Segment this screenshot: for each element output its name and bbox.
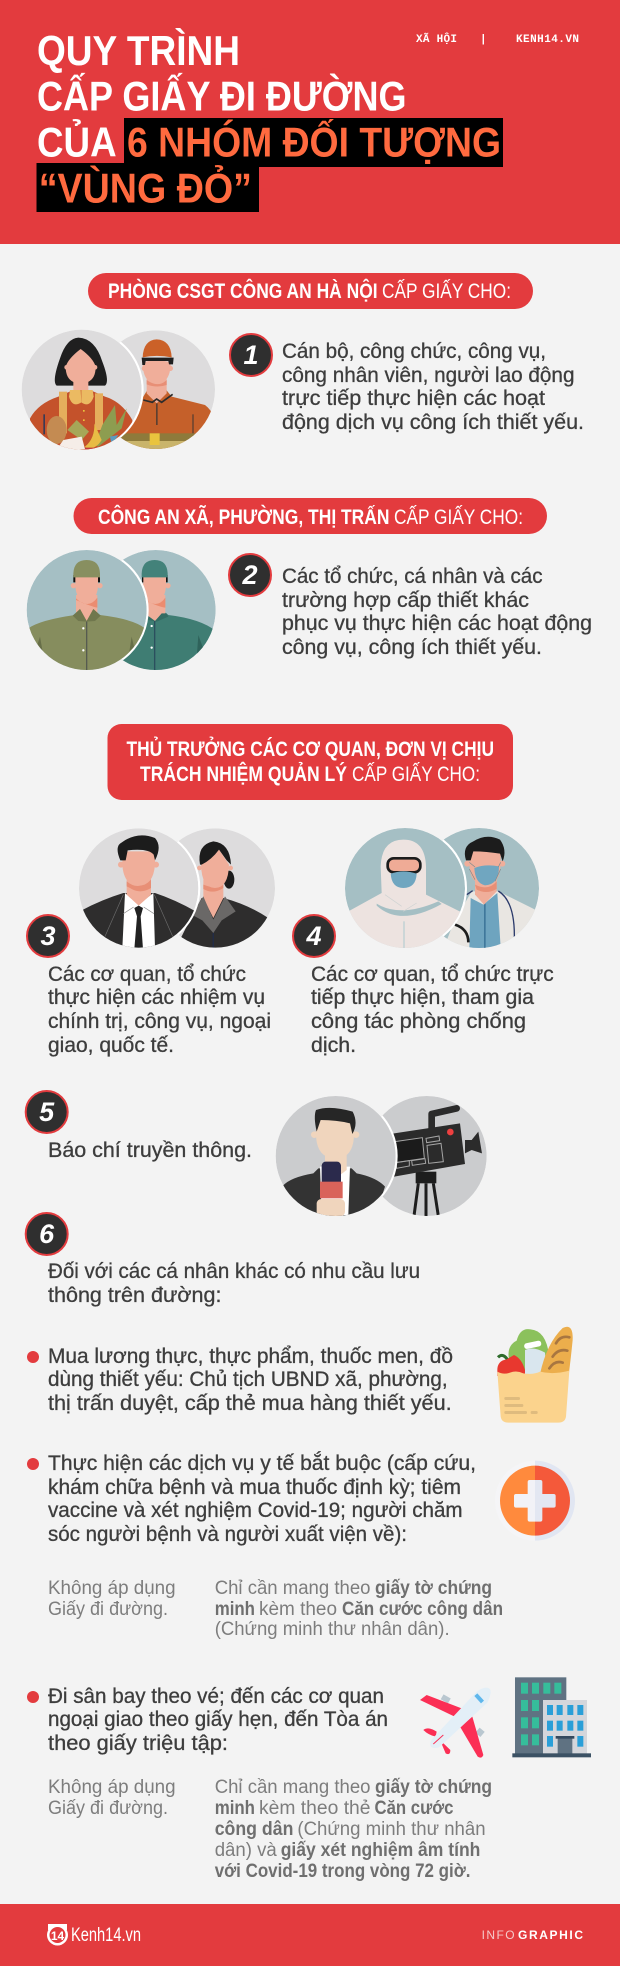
title: [36, 27, 503, 212]
text: item 4 description: [311, 963, 554, 1057]
text: item 3 description: chính trị, công vụ, ngoại: [48, 1010, 271, 1033]
panel: group 3 heading: TRÁCH NHIỆM QUẢN LÝ: [140, 762, 347, 786]
footer label: infographic: INFO: [482, 1928, 515, 1942]
text: item 4 description: tiếp thực hiện, tham gia: [311, 986, 534, 1009]
text: group 2 description: công vụ, công ích thiết yếu.: [282, 636, 542, 659]
header tag: [416, 32, 579, 46]
title: CỦA: [37, 118, 117, 166]
text: item 4 description: công tác phòng chống: [311, 1010, 526, 1033]
bullet: airport and appointments: Đi sân bay theo vé; đến các cơ quan: [48, 1685, 384, 1708]
title: 6 NHÓM ĐỐI TƯỢNG: [127, 118, 501, 166]
text: group 1 description: trực tiếp thực hiện các hoạt: [282, 387, 545, 410]
panel: group 1 heading: [88, 273, 533, 309]
text: item 6 intro: Đối với các cá nhân khác có nhu cầu lưu: [48, 1260, 420, 1283]
panel: group 3 heading: THỦ TRƯỞNG CÁC CƠ QUAN, ĐƠN VỊ CHỊU: [126, 737, 494, 761]
text: item 6 intro: thông trên đường:: [48, 1284, 222, 1307]
panel: group 2 heading: [74, 498, 547, 534]
badge: number 1: [230, 334, 272, 376]
badge: number 3: 3: [40, 921, 56, 951]
text: medical services note right: minh: [215, 1599, 255, 1620]
text: airport note right: kèm theo thẻ: [259, 1798, 370, 1819]
text: group 2 description: [282, 565, 592, 659]
illustration: office man and woman: [77, 826, 275, 950]
header tag: |: [480, 34, 487, 46]
text: item 4 description: dịch.: [311, 1034, 356, 1057]
bullet: airport and appointments: ngoại giao theo giấy hẹn, đến Tòa án: [48, 1708, 388, 1731]
bullet: buying essentials: dùng thiết yếu: Chủ tịch UBND xã, phường,: [48, 1368, 448, 1391]
text: group 1 description: động dịch vụ công ích thiết yếu.: [282, 411, 584, 434]
illustration: reporter and camera: [274, 1094, 487, 1218]
panel: group 3 heading: [108, 724, 513, 800]
panel: header: [0, 0, 620, 244]
text: medical services note right: Căn cước công dân: [342, 1599, 503, 1620]
title: CẤP GIẤY ĐI ĐƯỜNG: [37, 72, 406, 120]
badge: number 5: 5: [39, 1097, 55, 1127]
header tag: XÃ HỘI: [416, 32, 457, 46]
illustration: two officers: [25, 548, 217, 672]
icon: office building: [512, 1677, 591, 1757]
bullet: medical services: Thực hiện các dịch vụ y tế bắt buộc (cấp cứu,: [48, 1452, 476, 1475]
bullet: medical services: khám chữa bệnh và mua thuốc định kỳ; tiêm: [48, 1476, 461, 1499]
footer label: infographic: [482, 1928, 583, 1942]
text: group 2 description: trường hợp cấp thiết khác: [282, 589, 529, 612]
footer label: infographic: GRAPHIC: [518, 1928, 583, 1942]
text: medical services note right: kèm theo: [259, 1599, 337, 1620]
bullet: buying essentials: thị trấn duyệt, cấp thẻ mua hàng thiết yếu.: [48, 1392, 452, 1415]
icon: medical cross: [495, 1461, 575, 1541]
text: airport note right: giấy xét nghiệm âm tính: [281, 1840, 480, 1861]
panel: group 1 heading: PHÒNG CSGT CÔNG AN HÀ NỘI: [108, 279, 378, 303]
text: medical services note right: [215, 1578, 503, 1640]
text: group 2 description: Các tổ chức, cá nhân và các: [282, 565, 542, 588]
text: item 3 description: Các cơ quan, tổ chức: [48, 963, 246, 986]
text: airport note right: (Chứng minh thư nhân: [297, 1819, 486, 1840]
text: airport note right: [215, 1777, 492, 1882]
icon: grocery bag: [497, 1327, 573, 1423]
panel: footer: [0, 1904, 620, 1966]
logo: Kenh14: [47, 1924, 141, 1946]
badge: number 6: 6: [39, 1219, 55, 1249]
panel: group 1 heading: CẤP GIẤY CHO:: [382, 280, 511, 303]
text: airport note left: [48, 1777, 176, 1819]
text: item 5 description: Báo chí truyền thông.: [48, 1139, 252, 1162]
bullet: buying essentials: Mua lương thực, thực phẩm, thuốc men, đồ: [48, 1345, 453, 1368]
text: item 3 description: thực hiện các nhiệm vụ: [48, 986, 265, 1009]
panel: group 3 heading: CẤP GIẤY CHO:: [352, 763, 480, 786]
panel: group 2 heading: CÔNG AN XÃ, PHƯỜNG, THỊ TRẤN: [98, 505, 390, 529]
text: airport note left: Giấy đi đường.: [48, 1798, 168, 1819]
badge: number 4: [293, 915, 335, 957]
text: airport note right: dân) và: [215, 1840, 277, 1861]
text: medical services note right: giấy tờ chứng: [375, 1578, 492, 1599]
text: airport note left: Không áp dụng: [48, 1777, 176, 1798]
panel: group 2 heading: CẤP GIẤY CHO:: [394, 506, 523, 529]
text: medical services note left: Không áp dụng: [48, 1578, 176, 1599]
text: group 1 description: [282, 340, 584, 434]
title: QUY TRÌNH: [37, 27, 240, 74]
title: “VÙNG ĐỎ”: [39, 163, 252, 211]
text: medical services note left: Giấy đi đường.: [48, 1599, 168, 1620]
badge: number 4: 4: [305, 921, 322, 951]
text: airport note right: công dân: [215, 1819, 293, 1840]
bullet: airport and appointments: [27, 1685, 388, 1755]
text: medical services note left: [48, 1578, 176, 1620]
text: airport note right: Căn cước: [374, 1798, 454, 1819]
text: item 3 description: [48, 963, 271, 1057]
text: airport note right: minh: [215, 1798, 255, 1819]
text: group 1 description: công nhân viên, người lao động: [282, 364, 574, 387]
text: medical services note right: Chỉ cần mang theo: [215, 1578, 370, 1599]
text: airport note right: với Covid-19 trong vòng 72 giờ.: [215, 1861, 470, 1882]
bullet: medical services: vaccine và xét nghiệm Covid-19; người chăm: [48, 1499, 463, 1522]
text: item 6 intro: [48, 1260, 420, 1307]
badge: number 1: 1: [243, 340, 259, 370]
text: group 2 description: phục vụ thực hiện các hoạt động: [282, 612, 592, 635]
illustration: shop worker and labourer: [20, 328, 217, 454]
badge: number 2: [229, 554, 271, 596]
text: item 4 description: Các cơ quan, tổ chức trực: [311, 963, 554, 986]
badge: number 2: 2: [241, 560, 258, 590]
bullet: medical services: sóc người bệnh và người xuất viện về):: [48, 1523, 407, 1546]
badge: number 6: [26, 1213, 68, 1255]
badge: number 5: [26, 1091, 68, 1133]
text: item 3 description: giao, quốc tế.: [48, 1034, 174, 1057]
bullet: buying essentials: [27, 1345, 453, 1415]
illustration: hazmat suit and doctor: [343, 826, 539, 950]
badge: number 3: [27, 915, 69, 957]
header tag: KENH14.VN: [516, 34, 579, 46]
icon: airplane: [420, 1688, 491, 1758]
text: group 1 description: Cán bộ, công chức, công vụ,: [282, 340, 546, 363]
logo: Kenh14: Kenh14.vn: [71, 1925, 141, 1946]
text: airport note right: Chỉ cần mang theo: [215, 1777, 370, 1798]
logo: Kenh14: 14: [51, 1929, 64, 1943]
text: medical services note right: (Chứng minh thư nhân dân).: [215, 1619, 450, 1640]
text: airport note right: giấy tờ chứng: [375, 1777, 492, 1798]
bullet: medical services: [27, 1452, 476, 1546]
bullet: airport and appointments: theo giấy triệu tập:: [48, 1732, 228, 1755]
